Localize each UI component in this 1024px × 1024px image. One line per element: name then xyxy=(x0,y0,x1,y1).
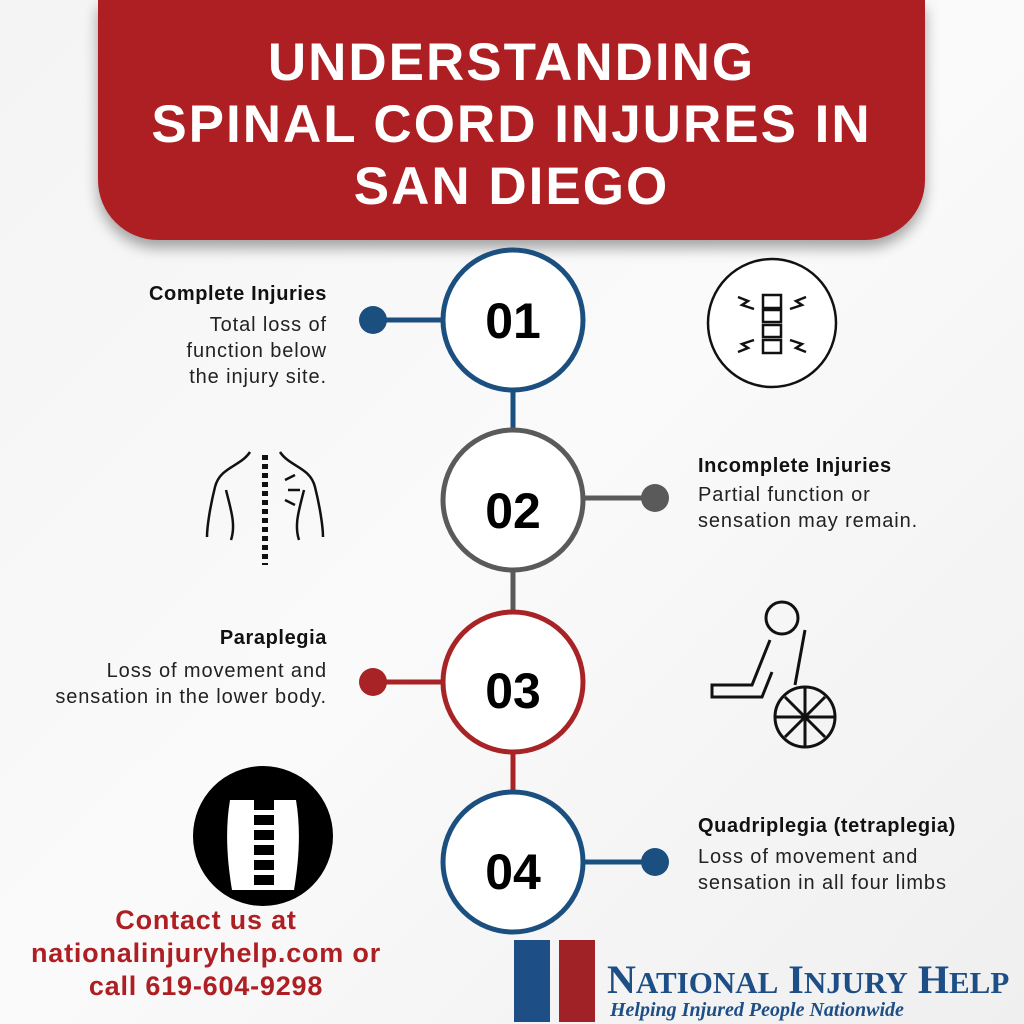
circle 03: 03 xyxy=(485,663,541,719)
circle 02 xyxy=(443,430,669,570)
contact text xyxy=(31,905,381,1001)
text: complete injuries: Total loss of xyxy=(210,314,327,336)
text: paraplegia: sensation in the lower body. xyxy=(55,686,327,708)
contact text: call 619-604-9298 xyxy=(89,971,323,1001)
title: UNDERSTANDING xyxy=(268,33,755,92)
text: incomplete injuries: Partial function or xyxy=(698,484,871,506)
title xyxy=(151,33,872,216)
text: quadriplegia xyxy=(698,815,956,894)
logo: Helping Injured People Nationwide xyxy=(610,999,904,1021)
connectors xyxy=(373,320,655,862)
contact text: nationalinjuryhelp.com or xyxy=(31,938,381,968)
icon: back with spine xyxy=(207,452,323,565)
text: quadriplegia: sensation in all four limbs xyxy=(698,872,947,894)
logo text: NATIONAL INJURY HELP xyxy=(607,957,1009,1002)
text: complete injuries: Complete Injuries xyxy=(149,283,327,305)
logo xyxy=(514,940,1009,1022)
title: SAN DIEGO xyxy=(354,157,669,216)
contact text: Contact us at xyxy=(115,905,297,935)
logo mark xyxy=(514,940,550,1022)
circle 01 xyxy=(359,250,583,390)
text: incomplete injuries: Incomplete Injuries xyxy=(698,455,892,477)
text: complete injuries xyxy=(149,283,327,388)
circle 01: 01 xyxy=(485,293,541,349)
text: paraplegia: Paraplegia xyxy=(220,627,327,649)
title banner xyxy=(98,0,925,240)
text: paraplegia: Loss of movement and xyxy=(107,660,327,682)
icon: wheelchair person xyxy=(712,602,835,747)
circle 02: 02 xyxy=(485,483,541,539)
text: complete injuries: function below xyxy=(187,340,327,362)
text: quadriplegia: Quadriplegia (tetraplegia) xyxy=(698,815,956,837)
text: incomplete injuries xyxy=(698,455,918,532)
circle 03 xyxy=(359,612,583,752)
text: quadriplegia: Loss of movement and xyxy=(698,846,918,868)
icon: black circle back xyxy=(193,766,333,906)
title: SPINAL CORD INJURES IN xyxy=(151,95,872,154)
text: paraplegia xyxy=(55,627,327,708)
circle 04: 04 xyxy=(485,844,541,900)
text: complete injuries: the injury site. xyxy=(189,366,327,388)
circle 04 xyxy=(443,792,669,932)
text: incomplete injuries: sensation may remain. xyxy=(698,510,918,532)
icon: spine with lightning xyxy=(708,259,836,387)
